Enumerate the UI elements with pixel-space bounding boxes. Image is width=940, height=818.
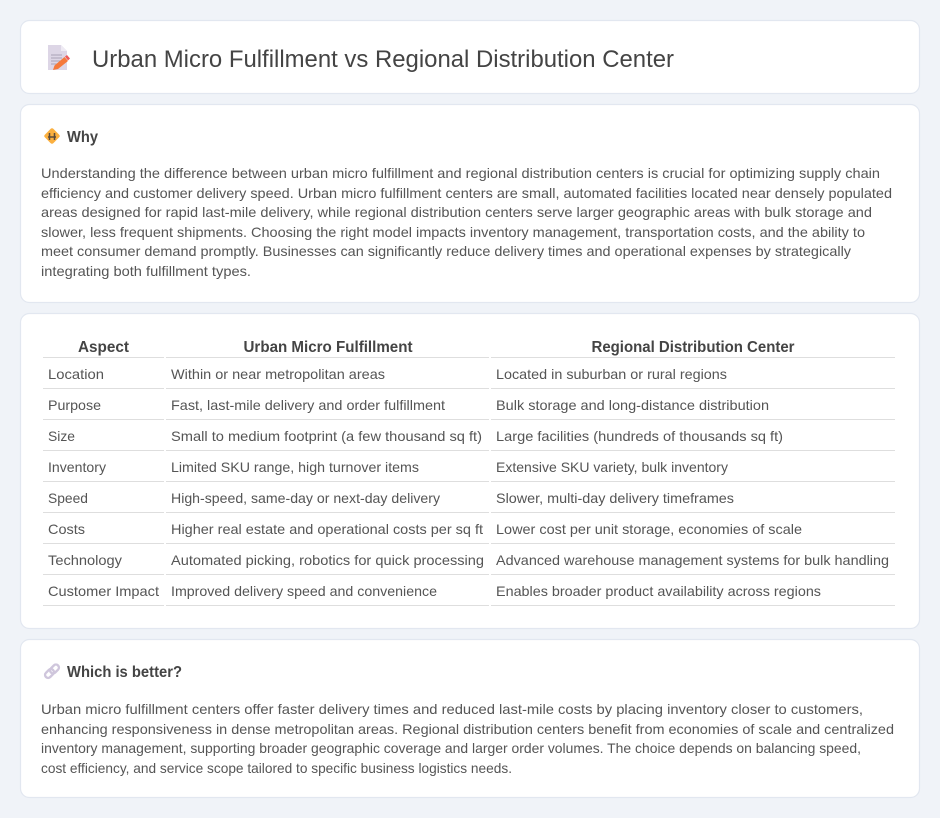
table header row: Urban Micro Fulfillment xyxy=(244,339,413,356)
panel: why xyxy=(20,104,920,302)
table row: purpose: Fast, last-mile delivery and order fulfillment xyxy=(171,397,445,413)
title: Urban Micro Fulfillment vs Regional Distribution Center xyxy=(92,46,674,73)
table row: purpose xyxy=(43,397,895,420)
text block: why paragraph: efficiency and customer delivery speed. Urban micro fulfillment centers are small, automated facilities located near densely populated xyxy=(41,185,892,201)
table header row: Aspect xyxy=(78,339,130,356)
table row: location: Located in suburban or rural regions xyxy=(496,366,727,382)
table row: customer impact: Customer Impact xyxy=(48,583,159,599)
panel: comparison table xyxy=(20,314,920,628)
table row: purpose: Purpose xyxy=(48,397,101,413)
text block: which is better paragraph: enhancing responsiveness in dense metropolitan areas. Regional distribution centers benefit from economies of scale and centralized xyxy=(41,721,894,737)
text block: which is better paragraph xyxy=(41,701,894,776)
table row: customer impact: Enables broader product availability across regions xyxy=(496,583,821,599)
heading: which is better: Which is better? xyxy=(67,664,182,681)
text block: why paragraph: slower, less frequent shipments. Choosing the right model impacts inventory management, transportation costs, and the ability to xyxy=(41,224,865,240)
text block: why paragraph xyxy=(41,165,892,279)
table row: size: Size xyxy=(48,428,75,444)
table row: speed: Speed xyxy=(48,490,88,506)
table row: speed: High-speed, same-day or next-day delivery xyxy=(171,490,440,506)
text block: which is better paragraph: cost efficiency, and service scope tailored to specific business logistics needs. xyxy=(41,760,512,776)
table row: technology: Advanced warehouse management systems for bulk handling xyxy=(496,552,889,568)
text block: why paragraph: Understanding the difference between urban micro fulfillment and regional distribution centers is crucial for optimizing supply chain xyxy=(41,165,880,181)
text block: which is better paragraph: Urban micro fulfillment centers offer faster delivery times and reduced last-mile costs by placing inventory closer to customers, xyxy=(41,701,863,717)
table row: purpose: Bulk storage and long-distance distribution xyxy=(496,397,769,413)
table row: location: Within or near metropolitan areas xyxy=(171,366,385,382)
table row: costs: Costs xyxy=(48,521,85,537)
table row: technology: Automated picking, robotics for quick processing xyxy=(171,552,484,568)
table row: speed xyxy=(43,490,895,512)
table row: location: Location xyxy=(48,366,104,382)
table header row xyxy=(43,339,895,358)
table row: technology: Technology xyxy=(48,552,122,568)
table row: inventory: Inventory xyxy=(48,459,106,475)
text block: why paragraph: areas designed for rapid last-mile delivery, while regional distribution centers serve larger geographic areas with bulk storage and xyxy=(41,204,872,220)
table row: size: Large facilities (hundreds of thousands sq ft) xyxy=(496,428,783,444)
table row: inventory: Extensive SKU variety, bulk inventory xyxy=(496,459,728,475)
icon: document with pencil xyxy=(48,45,70,70)
text block: why paragraph: meet consumer demand promptly. Businesses can significantly reduce delivery times and operational expenses by strategically xyxy=(41,243,851,259)
table row: technology xyxy=(43,552,895,574)
table row: size xyxy=(43,428,895,450)
table row: location xyxy=(43,366,895,388)
heading: why: Why xyxy=(67,129,98,146)
text block: which is better paragraph: inventory management, supporting broader geographic coverage and larger order volumes. The choice depends on balancing speed, xyxy=(41,740,861,756)
table row: costs: Higher real estate and operational costs per sq ft xyxy=(171,521,483,537)
table row: inventory: Limited SKU range, high turnover items xyxy=(171,459,419,475)
table row: customer impact: Improved delivery speed and convenience xyxy=(171,583,437,599)
table row: costs xyxy=(43,521,895,544)
table row: size: Small to medium footprint (a few thousand sq ft) xyxy=(171,428,482,444)
icon: warning diamond xyxy=(44,128,60,144)
panel: header xyxy=(20,20,920,94)
table row: inventory xyxy=(43,459,895,482)
panel: which is better xyxy=(20,640,920,798)
text block: why paragraph: integrating both fulfillment types. xyxy=(41,263,251,279)
table header row: Regional Distribution Center xyxy=(592,339,794,356)
table row: customer impact xyxy=(43,583,895,606)
table row: speed: Slower, multi-day delivery timeframes xyxy=(496,490,734,506)
icon: link xyxy=(44,663,60,679)
table row: costs: Lower cost per unit storage, economies of scale xyxy=(496,521,802,537)
